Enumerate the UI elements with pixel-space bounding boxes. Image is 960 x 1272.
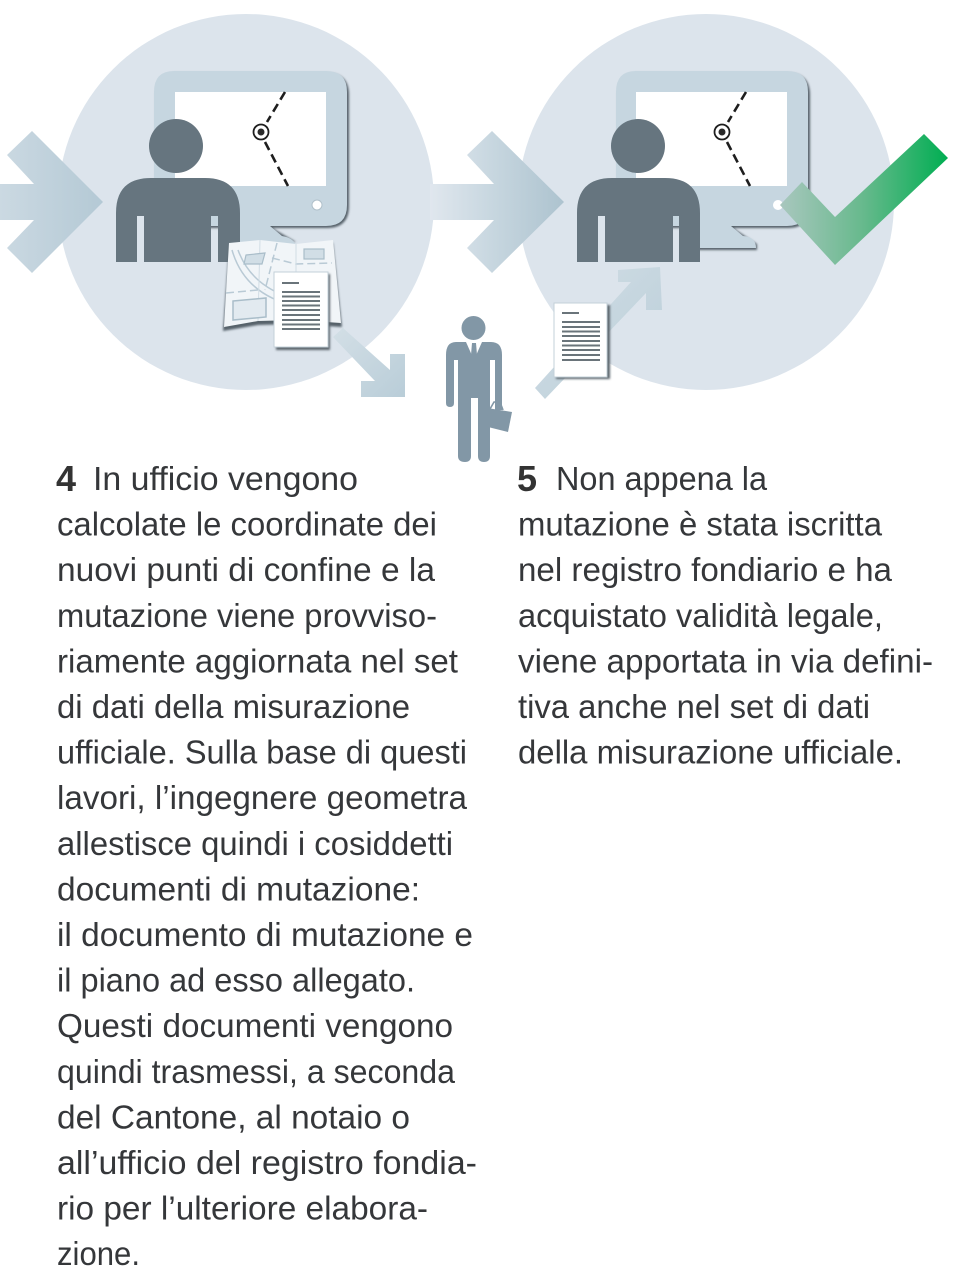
icon: green check mark [780,134,948,265]
arrow: documents to surveyor [333,328,405,397]
text block: step 5: mutazione è stata iscritta [518,506,883,543]
arrow: incoming to step 4 [0,131,103,273]
text block: step 4: rio per l’ulteriore elabora- [57,1190,428,1227]
text block: step 4 [56,458,477,1272]
icon: surveyor with briefcase [446,316,512,462]
text block: step 4: calcolate le coordinate dei [57,506,437,543]
text block: step 5: tiva anche nel set di dati [518,688,870,725]
text block: step 4: mutazione viene provviso- [57,597,437,634]
text block: step 5 [517,458,933,771]
text block: step 5: viene apportata in via defini- [518,642,933,679]
step number 4: 4 [56,458,76,499]
icon: person at desk 2 [577,119,700,262]
text block: step 4: In ufficio vengono [93,460,358,497]
text block: step 4: allestisce quindi i cosiddetti [57,825,453,862]
text block: step 5: della misurazione ufficiale. [518,734,903,771]
text block: step 4: lavori, l’ingegnere geometra [57,779,468,816]
step number 5: 5 [517,458,537,499]
background circle 2 [518,14,894,390]
text block: step 4: ufficiale. Sulla base di questi [57,734,467,771]
text block: step 4: del Cantone, al notaio o [57,1098,410,1135]
text block: step 4: di dati della misurazione [57,688,410,725]
text block: step 4: quindi trasmessi, a seconda [57,1053,456,1090]
panel: step 4 illustration [0,14,434,397]
background circle 1 [58,14,434,390]
icon: document 2 [554,303,610,379]
text block: step 4: riamente aggiornata nel set [57,642,458,679]
icon: person at desk 1 [116,119,240,262]
text block: step 4: documenti di mutazione: [57,870,420,907]
text block: step 5: Non appena la [556,460,768,497]
icon: map [223,240,342,331]
arrow: documents back to office [535,267,662,399]
panel: step 5 illustration [430,14,948,399]
text block: step 4: all’ufficio del registro fondia- [57,1144,477,1181]
text block: step 4: Questi documenti vengono [57,1007,453,1044]
text block: step 4: nuovi punti di confine e la [57,551,436,588]
arrow: step 4 to step 5 [430,131,564,273]
icon: monitor 2 [616,71,810,250]
text block: step 5: nel registro fondiario e ha [518,551,893,588]
text block: step 5: acquistato validità legale, [518,597,883,634]
text block: step 4: il piano ad esso allegato. [57,962,415,999]
icon: document 1 [274,272,330,350]
text block: step 4: zione. [57,1235,140,1272]
icon: monitor 1 [154,71,349,246]
text block: step 4: il documento di mutazione e [57,916,473,953]
